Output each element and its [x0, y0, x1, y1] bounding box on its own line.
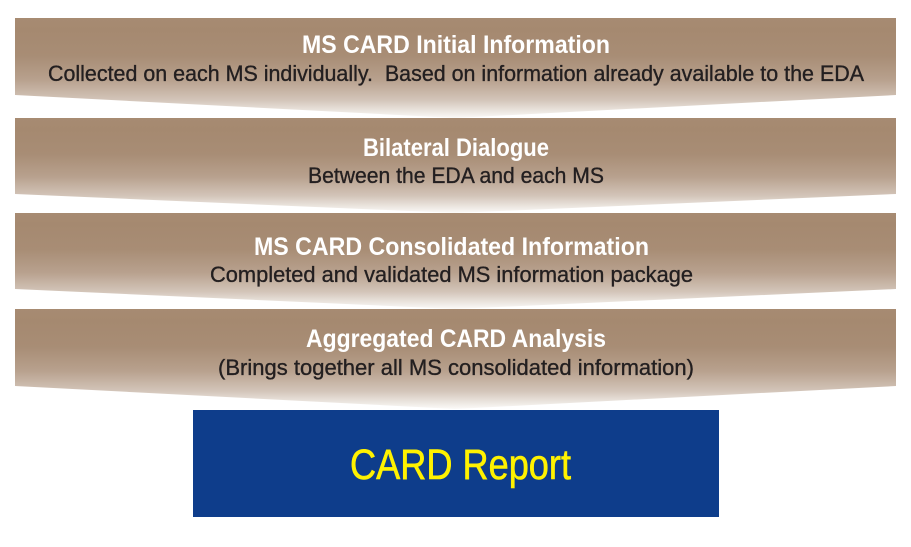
panel: Aggregated CARD Analysis	[15, 309, 896, 409]
heading: MS CARD Initial Information: MS CARD Initial Information	[302, 31, 610, 59]
heading: Bilateral Dialogue: Bilateral Dialogue	[363, 134, 549, 162]
heading: Aggregated CARD Analysis: Aggregated CARD Analysis	[306, 325, 606, 353]
text: panel 2 description: Between the EDA and each MS	[308, 163, 604, 188]
panel: MS CARD Consolidated Information	[15, 213, 896, 309]
text: panel 3 description: Completed and validated MS information package	[210, 262, 693, 287]
panel: MS CARD Initial Information	[15, 18, 896, 118]
heading: MS CARD Consolidated Information: MS CARD Consolidated Information	[254, 233, 649, 261]
panel: CARD Report	[193, 410, 719, 517]
text: panel 4 description: (Brings together all MS consolidated information)	[218, 355, 694, 380]
panel: Bilateral Dialogue	[15, 118, 896, 213]
text: panel 1 description: Collected on each MS individually. Based on information already available to the EDA	[48, 61, 864, 86]
heading: CARD Report: CARD Report	[350, 441, 571, 489]
